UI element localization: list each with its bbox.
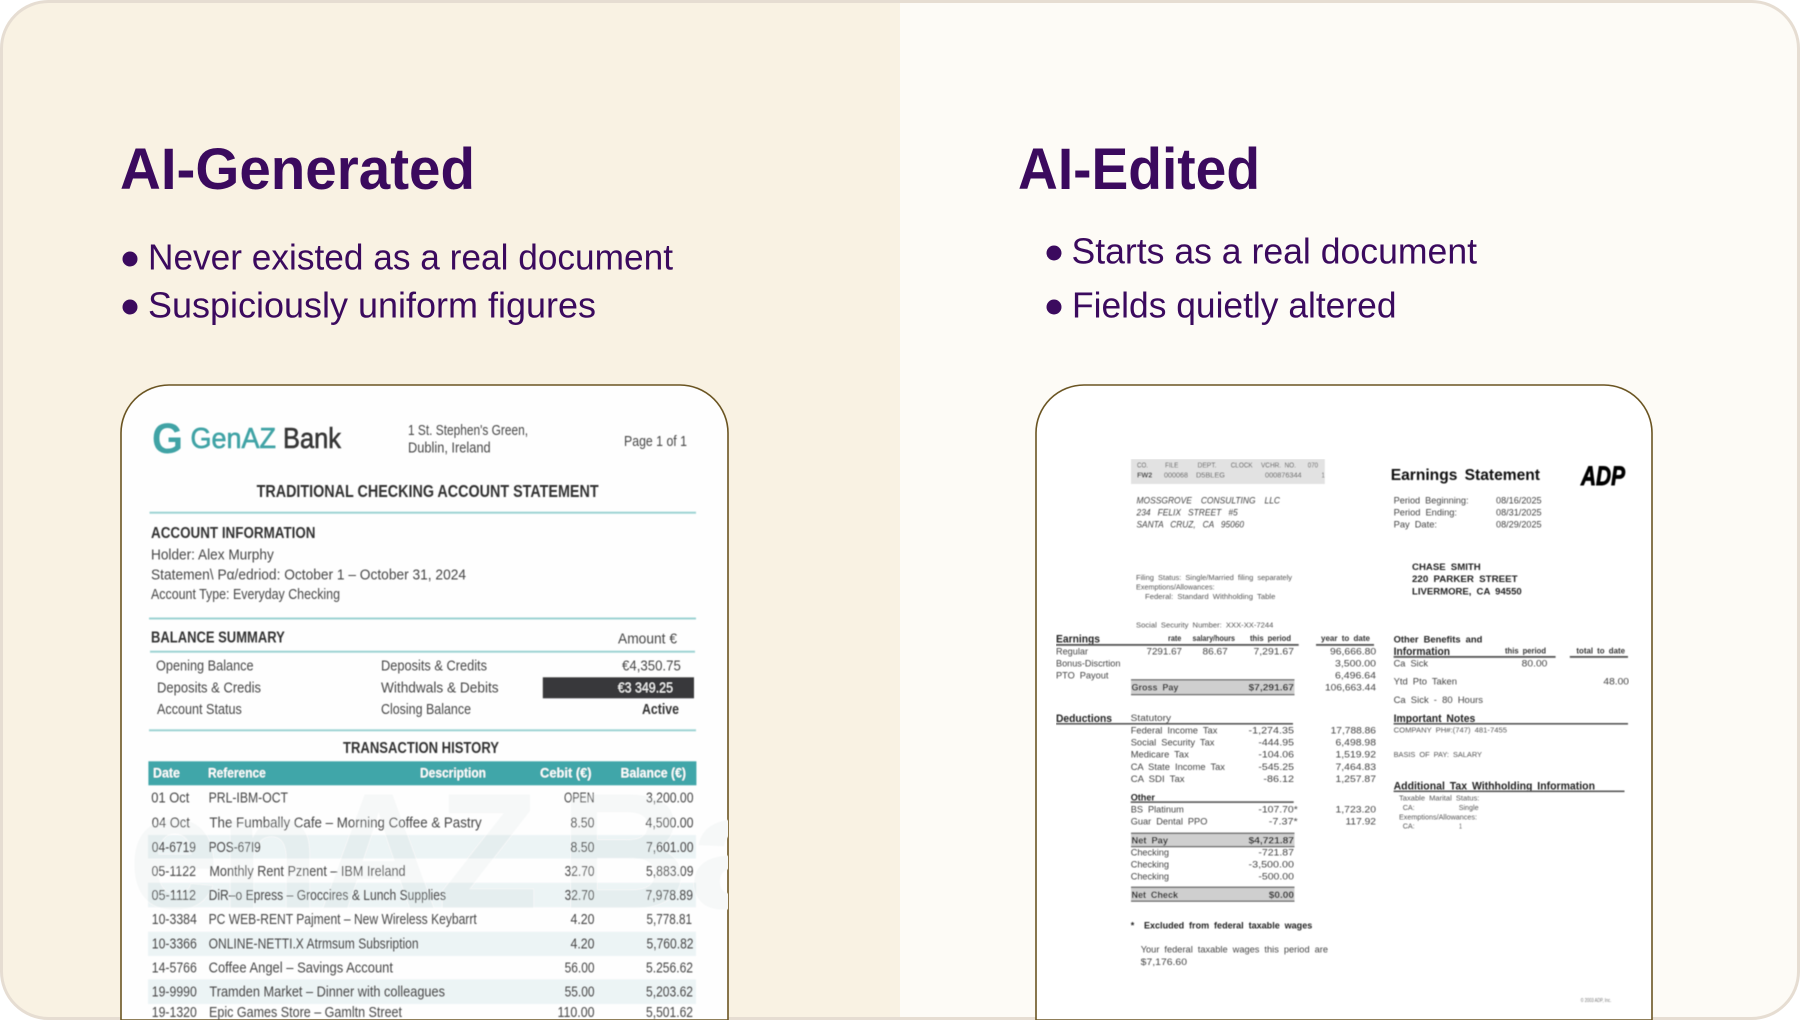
table rows: 32.70 [565,888,594,904]
filing status: Social Security Number: XXX-XX-7244 [1136,621,1273,630]
table rows: 5,778.81 [646,912,692,928]
section: additional tax withholding: 1 [1459,822,1462,831]
table: deductions: BS Platinum [1131,805,1184,816]
section: important notes: BASIS OF PAY: SALARY [1394,750,1482,759]
table header: Date [153,764,180,780]
section: additional tax withholding: Exemptions/Allowances: [1399,812,1477,821]
filing status: Filing Status: Single/Married filing separately [1136,573,1292,582]
table rows: 19-9990 [152,985,197,1001]
table: other benefits: this period [1505,646,1546,655]
table: deductions: Guar Dental PPO [1131,817,1207,828]
watermark [151,794,728,910]
table: other benefits: 48.00 [1603,677,1629,688]
table rows: 10-3366 [152,937,197,953]
table rows: 5.256.62 [646,961,693,977]
bullet list: AI-Edited traits: Fields quietly altered [1072,285,1396,326]
table: earnings: Bonus-Discrtion [1056,658,1120,669]
table: earnings: 6,496.64 [1335,671,1377,682]
heading: AI-Edited: AI-Edited [1018,137,1260,202]
table: deductions: Statutory [1131,713,1171,724]
table: deductions: 6,498.98 [1336,738,1376,749]
heading: AI-Generated: AI-Generated [120,137,475,202]
table: earnings: Earnings [1056,633,1100,645]
pay period: Period Ending: [1394,507,1457,518]
table header: Cebit (€) [540,764,592,780]
table: deductions: CA State Income Tax [1131,762,1225,773]
table: deductions: -104.06 [1258,750,1294,761]
footnote: excluded wages: $7,176.60 [1141,957,1187,968]
table rows: DiR–o Epress – Groccires & Lunch Supplies [209,888,446,904]
section: balance summary: Opening Balance [156,659,254,675]
gross pay bar: $7,291.67 [1248,683,1294,694]
table: deductions: 7,464.83 [1336,762,1376,773]
bank address: 1 St. Stephen's Green, [408,423,528,439]
employer code box: D5BLEG [1196,471,1225,480]
section: balance summary: €4,350.75 [622,659,681,675]
section: account information [151,525,466,603]
table: other benefits: Ca Sick - 80 Hours [1394,695,1483,706]
pay period [1394,495,1542,530]
section: balance summary: BALANCE SUMMARY [151,630,285,647]
table: earnings: year to date [1321,634,1371,643]
table: deductions: -500.00 [1258,872,1294,883]
section: account information: Account Type: Everyday Checking [151,587,340,603]
gross pay bar [1131,679,1294,695]
employer code box: DEPT. [1198,461,1216,470]
section: balance summary: Amount € [618,632,677,648]
panel: AI-Generated [120,146,729,1020]
employer code box: 000876344 [1265,471,1302,480]
table: deductions: -1,274.35 [1248,725,1294,736]
employee address: LIVERMORE, CA 94550 [1412,586,1522,597]
table header: Description [420,764,486,780]
table rows: 14-5766 [152,961,197,977]
section: important notes: COMPANY PH#:(747) 481-7455 [1394,726,1507,735]
table: deductions: Deductions [1056,713,1112,725]
employer code box: 1 [1322,471,1325,480]
section: balance summary: Account Status [157,702,242,718]
employee address [1412,562,1522,597]
table: deductions: CA SDI Tax [1131,774,1185,785]
section: balance summary: Active [642,702,679,718]
employer code box: FW2 [1137,471,1152,480]
document title: TRADITIONAL CHECKING ACCOUNT STATEMENT [257,481,599,501]
card: bank statement document [121,385,790,1020]
table: deductions [1056,713,1376,902]
section: additional tax withholding: Taxable Marital Status: [1399,793,1479,802]
table: deductions: Checking [1131,860,1169,871]
net check bar: $0.00 [1269,890,1294,901]
table: deductions: -721.87 [1258,848,1294,858]
section: additional tax withholding: Additional Tax Withholding Information [1394,780,1595,792]
table header: Reference [208,764,266,780]
logo: GenAZ Bank: G [152,415,183,463]
employer code box: 000068 [1164,471,1188,480]
table rows: Monthly Rent Pznent – IBM Ireland [209,864,406,880]
table rows: ONLINE-NETTI.X Atrmsum Subsription [209,937,419,953]
employer code box: CLOCK [1231,461,1253,470]
table: earnings: 7,291.67 [1254,646,1294,657]
employer code box [1131,459,1325,484]
table rows: Tramden Market – Dinner with colleagues [209,985,445,1001]
table: earnings: 7291.67 [1146,646,1182,657]
table rows: 04-6719 [152,840,196,856]
section: account information: Holder: Alex Murphy [151,548,274,564]
section: additional tax withholding [1394,780,1624,831]
table: deductions: Social Security Tax [1131,738,1215,749]
table rows: PC WEB-RENT Pajment – New Wireless Keybarrt [209,912,477,928]
employer code box: 070 [1308,461,1318,470]
pay period: 08/29/2025 [1496,519,1542,530]
table rows: 5,883.09 [646,864,694,880]
table rows: 8.50 [570,815,594,831]
section: account information: ACCOUNT INFORMATION [151,525,316,542]
bullet list: AI-Edited traits: Starts as a real document [1072,231,1477,272]
bank address: Dublin, Ireland [408,441,491,457]
panel: AI-Edited [1018,137,1652,1020]
table rows: 7,601.00 [646,840,694,856]
pay period: Pay Date: [1394,519,1437,530]
table header [148,761,696,785]
logo: GenAZ Bank: Bank [283,423,341,455]
section: balance summary: €3 349.25 [618,681,673,697]
table: earnings: 3,500.00 [1335,658,1376,669]
employer code box: FILE [1165,461,1178,470]
employer address [1136,495,1280,530]
net pay bar: $4,721.87 [1248,836,1294,846]
table rows: POS-67I9 [209,840,261,856]
table: deductions: -3,500.00 [1248,860,1294,871]
table rows: 04 Oct [152,815,190,831]
table: earnings: PTO Payout [1056,671,1109,682]
employer address: MOSSGROVE CONSULTING LLC [1136,495,1280,505]
filing status [1136,573,1292,630]
section: balance summary [150,630,695,718]
section: additional tax withholding: CA: [1403,822,1415,831]
bank address [408,423,528,457]
table: other benefits: Other Benefits and [1394,635,1482,646]
section: balance summary: Deposits & Credits [381,659,487,675]
table rows: 01 Oct [151,791,189,807]
watermark: Ba [559,759,790,943]
section: additional tax withholding: Single [1459,803,1479,812]
net check bar: Net Check [1132,890,1179,901]
table header: Balance (€) [621,764,686,780]
table: deductions: 17,788.86 [1331,725,1376,736]
table: deductions: -86.12 [1263,774,1294,785]
table: transactions [148,761,696,1020]
footnote: excluded wages: * Excluded from federal taxable wages [1131,920,1312,931]
table rows: 05-1112 [152,888,196,904]
pay period: Period Beginning: [1394,495,1469,506]
card: earnings statement document [1036,385,1652,1020]
pay period: 08/31/2025 [1496,507,1542,518]
table rows: 55.00 [565,985,594,1001]
table rows: 10-3384 [152,912,197,928]
table: earnings: salary/hours [1192,634,1235,643]
table rows [151,791,694,1020]
table: deductions: 1,519.92 [1336,750,1376,761]
table: other benefits: 80.00 [1522,658,1547,669]
table: other benefits [1394,635,1629,706]
table: other benefits: total to date [1576,646,1626,655]
table: other benefits: Ca Sick [1394,658,1428,669]
table: deductions: Checking [1131,872,1169,883]
gross pay bar: Gross Pay [1132,683,1179,694]
table rows: Coffee Angel – Savings Account [209,961,393,977]
table rows: 3,200.00 [646,791,694,807]
table rows: 32.70 [565,864,594,880]
filing status: Exemptions/Allowances: [1136,582,1214,591]
table: deductions: -545.25 [1258,762,1294,773]
bullet list: AI-Edited traits [1046,231,1477,326]
employer code box: CO. [1137,461,1148,470]
filing status: Federal: Standard Withholding Table [1145,592,1275,601]
logo: ADP: ADP [1580,461,1626,491]
net pay bar: Net Pay [1132,836,1169,846]
table rows: 05-1122 [152,864,196,880]
table rows: 4.20 [570,937,594,953]
section: additional tax withholding: CA: [1403,803,1415,812]
employer code box: VCHR. NO. [1261,461,1296,470]
table rows: 5,203.62 [646,985,693,1001]
section heading: transaction history: TRANSACTION HISTORY [343,740,499,757]
table: deductions: 1,723.20 [1336,805,1376,816]
section: balance summary: Deposits & Credis [157,681,261,697]
table rows: The Fumbally Cafe – Morning Coffee & Pastry [209,815,482,831]
table rows: 5,760.82 [646,937,694,953]
employer address: 234 FELIX STREET #5 [1136,508,1239,518]
table rows: PRL-IBM-OCT [209,791,288,807]
section: balance summary: Withdwals & Debits [381,681,499,697]
logo: GenAZ Bank [152,422,342,454]
bullet list: AI-Generated traits: Suspiciously uniform figures [148,285,596,326]
bullet list: AI-Generated traits: Never existed as a real document [148,236,673,278]
table: deductions: -107.70* [1258,805,1298,816]
table: earnings: 106,663.44 [1325,683,1377,694]
section: account information: Statemen\ Pα/edriod: October 1 – October 31, 2024 [151,568,466,584]
table: earnings: this period [1250,634,1291,643]
employee address: CHASE SMITH [1412,562,1481,573]
table rows: 56.00 [565,961,594,977]
bullet list: AI-Generated traits [122,236,673,326]
table: earnings: 86.67 [1202,646,1228,657]
table: deductions: -444.95 [1258,738,1294,749]
table: other benefits: Information [1394,646,1450,658]
table rows: 7,978.89 [646,888,693,904]
table: deductions: -7.37* [1269,817,1298,828]
page number: Page 1 of 1 [624,434,687,450]
table: earnings [1056,633,1377,695]
table: earnings: rate [1168,634,1182,643]
employee address: 220 PARKER STREET [1412,574,1518,585]
footnote: excluded wages [1131,920,1328,968]
section: balance summary: Closing Balance [381,702,471,718]
net pay bar [1131,833,1294,847]
footnote: excluded wages: Your federal taxable wages this period are [1141,945,1328,956]
section: important notes: Important Notes [1394,713,1475,725]
employer address: SANTA CRUZ, CA 95060 [1136,520,1244,530]
statement title: Earnings Statement [1391,467,1541,484]
table rows: 4,500.00 [646,815,694,831]
net check bar [1131,887,1294,902]
table rows: OPEN [564,791,594,807]
table: deductions: Federal Income Tax [1131,725,1218,736]
table: deductions: Other [1131,792,1155,803]
table: earnings: 96,666.80 [1330,646,1376,657]
table: other benefits: Ytd Pto Taken [1394,677,1457,688]
watermark: enAZ [128,759,538,943]
table: deductions: Medicare Tax [1131,750,1189,761]
section: important notes [1394,713,1628,759]
table rows: 8.50 [570,840,594,856]
table: deductions: Checking [1131,848,1169,858]
table rows: 4.20 [570,912,594,928]
table: deductions: 1,257.87 [1336,774,1376,785]
table: earnings: Regular [1056,646,1089,657]
logo: GenAZ Bank: GenAZ [190,423,276,455]
copyright note: © 2003 ADP, Inc. [1581,997,1611,1004]
pay period: 08/16/2025 [1496,495,1542,506]
table: deductions: 117.92 [1346,817,1376,828]
